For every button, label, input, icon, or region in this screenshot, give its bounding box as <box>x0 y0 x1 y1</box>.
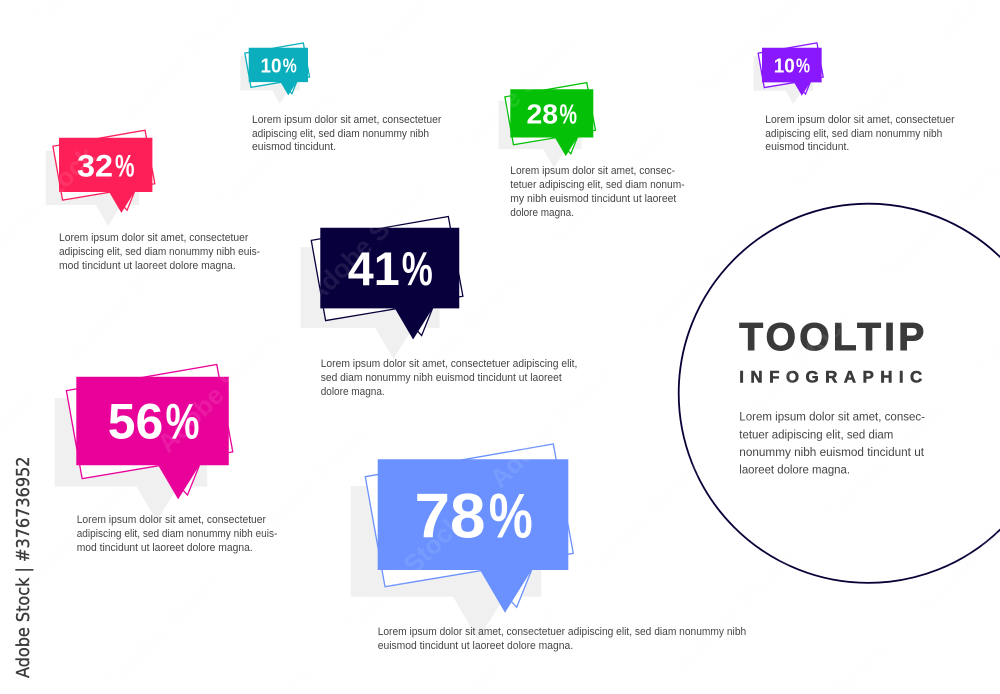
text block: teal 10%: Lorem ipsum dolor sit amet, consectetuer <box>252 114 442 126</box>
tooltip: teal 10% <box>240 43 310 104</box>
tooltip: green 28% <box>499 83 595 168</box>
label: green 28%: % <box>560 98 577 129</box>
description <box>739 410 925 476</box>
text block: green 28%: Lorem ipsum dolor sit amet, consec- <box>510 165 675 177</box>
circle outline <box>679 204 1000 583</box>
label: purple 10%: 10 <box>774 54 795 77</box>
label: red 32%: % <box>115 148 134 184</box>
text block: red 32% <box>59 232 260 272</box>
text block: red 32%: adipiscing elit, sed diam nonummy nibh euis- <box>59 246 260 258</box>
label: purple 10%: % <box>796 54 810 77</box>
title: TOOLTIP <box>739 316 924 359</box>
panel: title circle <box>679 204 1000 583</box>
description: nonummy nibh euismod tincidunt ut <box>739 445 925 459</box>
text block: magenta 56%: adipiscing elit, sed diam nonummy nibh euis- <box>77 528 278 540</box>
text block: navy 41% <box>321 358 577 398</box>
text block: purple 10%: Lorem ipsum dolor sit amet, consectetuer <box>765 114 955 126</box>
label: teal 10%: % <box>283 54 297 77</box>
tooltip: navy 41% <box>301 217 463 359</box>
text block: purple 10%: euismod tincidunt. <box>765 141 849 153</box>
label: red 32%: 32 <box>77 148 113 184</box>
text block: navy 41%: sed diam nonummy nibh euismod tincidunt ut laoreet <box>321 372 562 384</box>
label: navy 41%: 41 <box>348 242 400 295</box>
label: teal 10%: 10 <box>260 54 282 77</box>
label: green 28% <box>526 98 577 129</box>
description: laoreet dolore magna. <box>739 462 850 476</box>
text block: purple 10%: adipiscing elit, sed diam nonummy nibh <box>765 128 942 140</box>
text block: teal 10%: euismod tincidunt. <box>252 141 336 153</box>
description: tetuer adipiscing elit, sed diam <box>739 427 893 441</box>
label: blue 78%: % <box>489 482 533 552</box>
label: red 32% <box>77 148 134 184</box>
label: magenta 56%: 56 <box>108 393 163 449</box>
text block: blue 78%: Lorem ipsum dolor sit amet, consectetuer adipiscing elit, sed diam nonummy nibh <box>378 626 746 638</box>
label: teal 10% <box>260 54 297 77</box>
text block: blue 78% <box>378 626 746 652</box>
subtitle: INFOGRAPHIC <box>739 367 922 386</box>
text block: teal 10%: adipiscing elit, sed diam nonummy nibh <box>252 128 429 140</box>
label: purple 10% <box>774 54 810 77</box>
label: blue 78% <box>414 482 533 552</box>
text block: green 28% <box>510 165 685 219</box>
tooltip: magenta 56% <box>55 364 233 521</box>
text block: green 28%: dolore magna. <box>510 207 574 219</box>
stock id vertical text: Adobe Stock | #376736952 <box>14 456 34 678</box>
label: navy 41%: % <box>402 242 433 295</box>
label: navy 41% <box>348 242 433 295</box>
text block: magenta 56% <box>77 514 278 554</box>
text block: blue 78%: euismod tincidunt ut laoreet dolore magna. <box>378 640 573 652</box>
label: green 28%: 28 <box>526 98 558 129</box>
tooltip: red 32% <box>46 130 155 226</box>
text block: magenta 56%: mod tincidunt ut laoreet dolore magna. <box>77 542 253 554</box>
text block: purple 10% <box>765 114 955 153</box>
text block: navy 41%: dolore magna. <box>321 386 385 398</box>
label: magenta 56%: % <box>166 393 200 449</box>
description: Lorem ipsum dolor sit amet, consec- <box>739 410 925 424</box>
tooltip: blue 78% <box>351 444 573 639</box>
label: magenta 56% <box>108 393 200 449</box>
text block: red 32%: Lorem ipsum dolor sit amet, consectetuer <box>59 232 249 244</box>
text block: teal 10% <box>252 114 442 153</box>
tooltip: purple 10% <box>754 43 823 104</box>
text block: green 28%: my nibh euismod tincidunt ut laoreet <box>510 193 676 205</box>
text block: magenta 56%: Lorem ipsum dolor sit amet, consectetuer <box>77 514 266 526</box>
text block: navy 41%: Lorem ipsum dolor sit amet, consectetuer adipiscing elit, <box>321 358 577 370</box>
label: blue 78%: 78 <box>414 482 486 552</box>
text block: red 32%: mod tincidunt ut laoreet dolore magna. <box>59 260 236 272</box>
text block: green 28%: tetuer adipiscing elit, sed diam nonum- <box>510 179 685 191</box>
